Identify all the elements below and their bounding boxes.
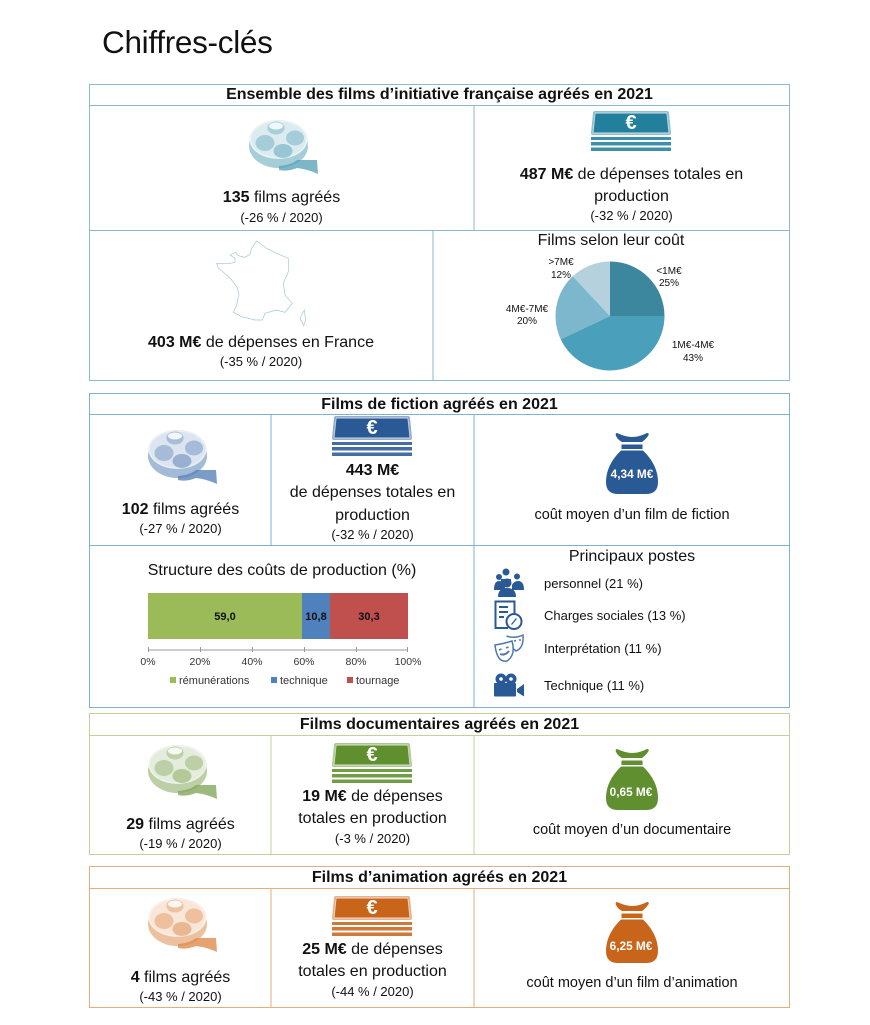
- pie chart: films selon leur coût: 1M€-4M€: [672, 340, 715, 351]
- icon: stack of euro notes orange: €: [366, 897, 378, 919]
- bar chart: structure des coûts: 80%: [345, 656, 367, 668]
- panel: films documentaires: [89, 714, 790, 854]
- stat: dépenses totales: 487 M€ de dépenses totales en: [520, 166, 743, 183]
- icon: film reel blue: [148, 430, 217, 484]
- stat: films agréés: 135 films agréés: [223, 189, 340, 206]
- stat: dépenses animation: 25 M€ de dépenses: [302, 941, 443, 958]
- stat: animation agréés: [131, 969, 230, 1004]
- icon: film reel teal: [249, 120, 318, 174]
- stat: dépenses documentaires: totales en production: [298, 810, 447, 827]
- icon: money bag green: [606, 749, 658, 810]
- icon: film reel green: [148, 745, 217, 799]
- caption: coût moyen animation: coût moyen d’un film d’animation: [526, 975, 738, 991]
- stat: films agréés: (-26 % / 2020): [240, 210, 323, 225]
- panel: films de fiction: [89, 394, 790, 708]
- icon: stack of euro notes blue: €: [366, 417, 378, 439]
- caption: coût moyen documentaire: coût moyen d’un documentaire: [533, 822, 731, 838]
- icon: people: [494, 568, 524, 597]
- bar chart: structure des coûts: rémunérations: [179, 675, 250, 687]
- icon: map of France: [217, 241, 306, 326]
- pie chart: films selon leur coût: 4M€-7M€: [506, 304, 549, 315]
- panel: ensemble des films: [89, 84, 790, 380]
- stat: films agréés: [223, 189, 340, 225]
- bar chart: structure des coûts: Structure des coûts de production (%): [148, 562, 416, 579]
- icon: stack of euro notes green: €: [366, 744, 378, 766]
- list: principaux postes: Principaux postes: [569, 548, 695, 565]
- stat: dépenses totales: (-32 % / 2020): [590, 208, 673, 223]
- list: principaux postes: personnel (21 %): [544, 576, 643, 591]
- icon: stack of euro notes teal: €: [625, 112, 637, 134]
- icon: money bag blue: 4,34 M€: [611, 467, 654, 481]
- stat: documentaires agréés: [126, 816, 235, 851]
- stat: films de fiction agréés: [122, 501, 239, 536]
- stat: documentaires agréés: 29 films agréés: [126, 816, 235, 833]
- heading: animation: Films d’animation agréés en 2021: [312, 869, 567, 886]
- pie chart: films selon leur coût: 20%: [517, 316, 537, 327]
- stat: dépenses totales: [520, 166, 743, 223]
- icon: stack of euro notes orange: [332, 896, 412, 936]
- pie chart: films selon leur coût: 25%: [659, 278, 679, 289]
- heading: documentaires: Films documentaires agréés en 2021: [300, 716, 579, 733]
- icon: stack of euro notes teal: [591, 111, 671, 151]
- stat: dépenses en France: (-35 % / 2020): [220, 354, 302, 369]
- bar chart: structure des coûts: technique: [280, 675, 328, 687]
- icon: film reel orange: [148, 898, 217, 952]
- stat: dépenses documentaires: [298, 788, 447, 846]
- pie chart: films selon leur coût: [506, 232, 715, 370]
- stat: dépenses documentaires: (-3 % / 2020): [335, 831, 410, 846]
- stat: dépenses animation: (-44 % / 2020): [331, 984, 414, 999]
- stat: dépenses documentaires: 19 M€ de dépenses: [302, 788, 443, 805]
- icon: stack of euro notes blue: [332, 416, 412, 456]
- heading: fiction: Films de fiction agréés en 2021: [321, 396, 558, 413]
- stat: films de fiction agréés: (-27 % / 2020): [139, 521, 222, 536]
- pie chart: films selon leur coût: <1M€: [656, 266, 682, 277]
- stat: dépenses en France: [148, 334, 374, 369]
- pie chart: films selon leur coût: 12%: [551, 270, 571, 281]
- bar chart: structure des coûts: 0%: [140, 656, 156, 668]
- icon: movie camera: [494, 674, 524, 696]
- stat: dépenses animation: [298, 941, 447, 999]
- bar chart: structure des coûts: 30,3: [358, 611, 380, 623]
- stat: animation agréés: (-43 % / 2020): [139, 989, 222, 1004]
- stat: dépenses totales: production: [594, 188, 669, 205]
- pie chart: films selon leur coût: 43%: [683, 353, 703, 364]
- icon: money bag green: 0,65 M€: [610, 785, 653, 799]
- icon: document with percent: [496, 602, 522, 629]
- stat: films de fiction agréés: 102 films agréés: [122, 501, 239, 518]
- bar chart: structure des coûts: 59,0: [214, 611, 236, 623]
- stat: dépenses fiction: de dépenses totales en: [290, 484, 455, 501]
- bar chart: structure des coûts: tournage: [356, 675, 399, 687]
- bar chart: structure des coûts: 40%: [241, 656, 263, 668]
- list: principaux postes: [494, 548, 695, 696]
- pie chart: films selon leur coût: >7M€: [548, 257, 574, 268]
- list: principaux postes: Charges sociales (13 %): [544, 608, 686, 623]
- bar chart: structure des coûts: 20%: [189, 656, 211, 668]
- bar chart: structure des coûts: 60%: [293, 656, 315, 668]
- icon: theatre masks: [495, 635, 523, 661]
- icon: money bag orange: 6,25 M€: [610, 939, 653, 953]
- stat: documentaires agréés: (-19 % / 2020): [139, 836, 222, 851]
- list: principaux postes: Technique (11 %): [544, 678, 644, 693]
- heading: ensemble: Ensemble des films d’initiative française agréés en 2021: [226, 86, 653, 103]
- bar chart: structure des coûts: 10,8: [305, 611, 327, 623]
- list: principaux postes: Interprétation (11 %): [544, 641, 662, 656]
- title: Chiffres-clés: [102, 24, 273, 60]
- icon: stack of euro notes green: [332, 743, 412, 783]
- stat: dépenses animation: totales en production: [298, 963, 447, 980]
- caption: coût moyen fiction: coût moyen d’un film de fiction: [534, 507, 730, 523]
- icon: money bag blue: [606, 433, 658, 494]
- stat: dépenses fiction: (-32 % / 2020): [331, 527, 414, 542]
- panel: films d'animation: [89, 866, 790, 1008]
- bar chart: structure des coûts: 100%: [395, 656, 421, 668]
- icon: money bag orange: [606, 902, 658, 963]
- stat: dépenses fiction: 443 M€: [346, 462, 399, 479]
- pie chart: films selon leur coût: Films selon leur coût: [538, 232, 685, 249]
- stat: dépenses fiction: [290, 462, 455, 542]
- stat: dépenses fiction: production: [335, 507, 410, 524]
- stat: dépenses en France: 403 M€ de dépenses en France: [148, 334, 374, 351]
- bar chart: structure des coûts: [140, 562, 421, 687]
- stat: animation agréés: 4 films agréés: [131, 969, 230, 986]
